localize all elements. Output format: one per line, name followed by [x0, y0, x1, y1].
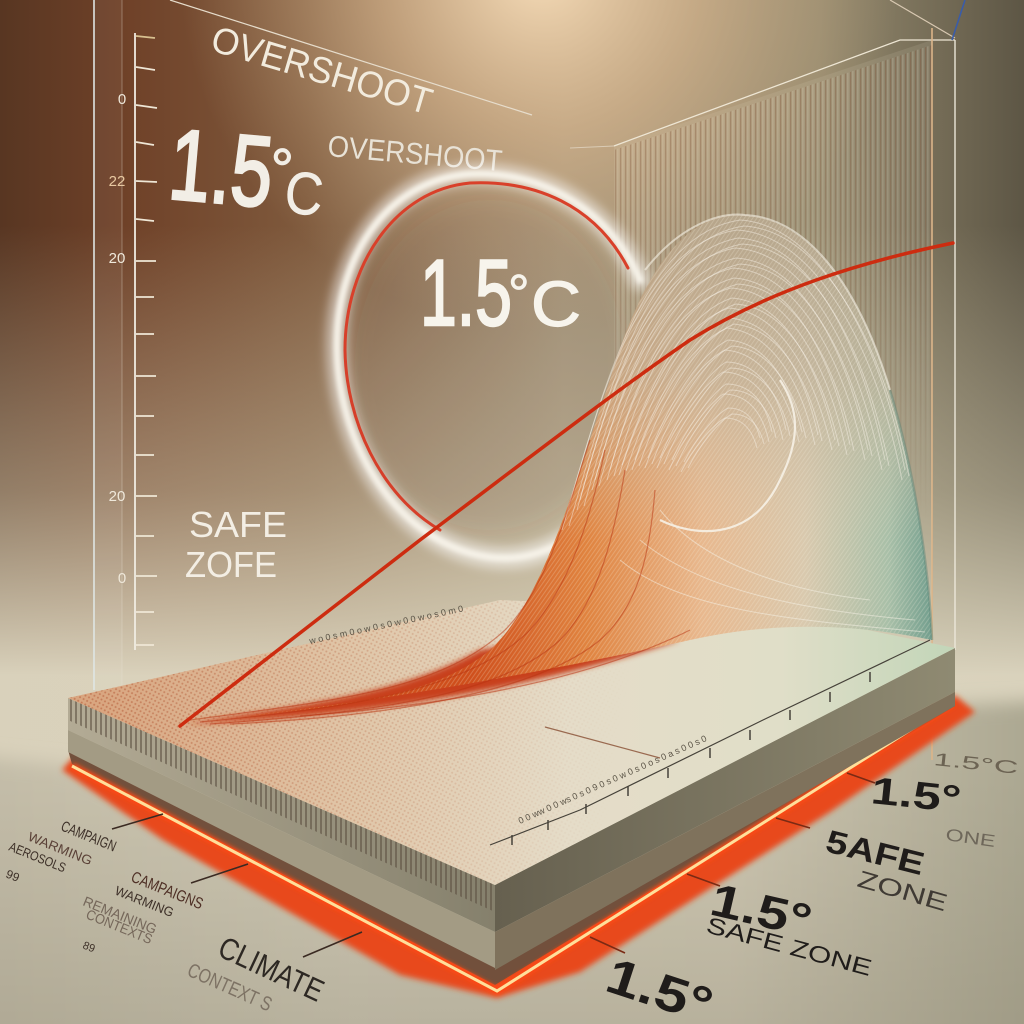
scale: left axis: 0: [118, 570, 126, 587]
sub-heading: overshoot: OVERSHOOT: [326, 130, 504, 178]
top surface: [68, 600, 955, 885]
labels: left floor: 99: [4, 867, 22, 885]
heading: 1.5°C left: °: [267, 136, 296, 203]
heading: 1.5°C center: C: [531, 268, 581, 340]
heading: overshoot: OVERSHOOT: [207, 18, 437, 122]
surface marks: 0 0 ww 0 0 ws 0 s 0 9 0 s 0 w 0 s 0 o s 0 a s 0 0 s 0: [517, 733, 708, 826]
safe zone label: SAFE: [189, 504, 287, 545]
labels: left floor: WARMING: [113, 883, 176, 920]
labels: left floor: CAMPAIGN: [59, 818, 119, 855]
orange base flow: [185, 640, 680, 724]
ring interior shading: [355, 200, 625, 530]
scale: left axis: 20: [109, 488, 125, 505]
neon line: [72, 703, 953, 991]
floor: [0, 700, 1024, 1024]
heading: 1.5°C center: 1.5: [420, 240, 512, 345]
labels: left floor: REMAINING: [81, 893, 159, 937]
hill right contour: [890, 390, 932, 640]
scale: left axis: 20: [109, 250, 125, 267]
left face: [68, 698, 495, 932]
labels: left floor: AEROSOLS: [7, 839, 68, 875]
labels: left floor: [4, 818, 205, 955]
red trajectory line: [180, 243, 953, 726]
labels: right floor: 1.5°: [706, 873, 817, 947]
back panel vertical lines: [615, 46, 932, 414]
labels: left floor: CONTEXTS: [84, 906, 155, 947]
labels: right floor: 5AFE: [822, 823, 928, 882]
top surface texture: [70, 600, 576, 884]
labels: left floor: WARMING: [26, 829, 95, 868]
platform lower slab: [68, 692, 955, 985]
glass enclosure: [94, 0, 965, 760]
scale: left axis: 22: [109, 173, 125, 190]
callout leader lines: [112, 773, 875, 957]
surface marks: w o 0 s m 0 o w 0 s 0 w 0 0 w o s 0 m 0: [307, 604, 464, 646]
overshoot hill: [185, 215, 932, 724]
surface marks: [307, 604, 708, 826]
platform: [62, 600, 975, 998]
right face: [495, 648, 955, 932]
hill ridges: [562, 215, 925, 632]
surface axis: [490, 640, 930, 845]
heading: 1.5°C center: °: [508, 264, 530, 324]
safe zone label: [185, 504, 287, 585]
heading: 1.5°C left: C: [282, 158, 326, 229]
label: climate: CONTEXT S: [184, 959, 275, 1016]
label: climate: CLIMATE: [213, 930, 329, 1009]
ring: 1.5°C threshold: [337, 174, 640, 558]
labels: right floor: [600, 749, 1019, 1024]
scale: left axis: 0: [118, 91, 126, 108]
labels: right floor: 1.5°: [869, 770, 963, 821]
left face ribs: [68, 698, 495, 912]
heading: 1.5°C left: 1.5: [165, 108, 277, 229]
safe zone label: ZOFE: [185, 544, 277, 585]
hill inner red flow lines: [190, 440, 690, 724]
labels: right floor: 1.5°C: [933, 749, 1019, 778]
neon band under platform: [62, 695, 975, 998]
labels: left floor: 89: [81, 940, 97, 955]
labels: left floor: CAMPAIGNS: [129, 869, 205, 913]
labels: right floor: ZONE: [854, 866, 950, 917]
scale: left axis: [109, 33, 157, 650]
labels: right floor: SAFE ZONE: [704, 912, 875, 981]
labels: right floor: ONE: [944, 825, 997, 851]
